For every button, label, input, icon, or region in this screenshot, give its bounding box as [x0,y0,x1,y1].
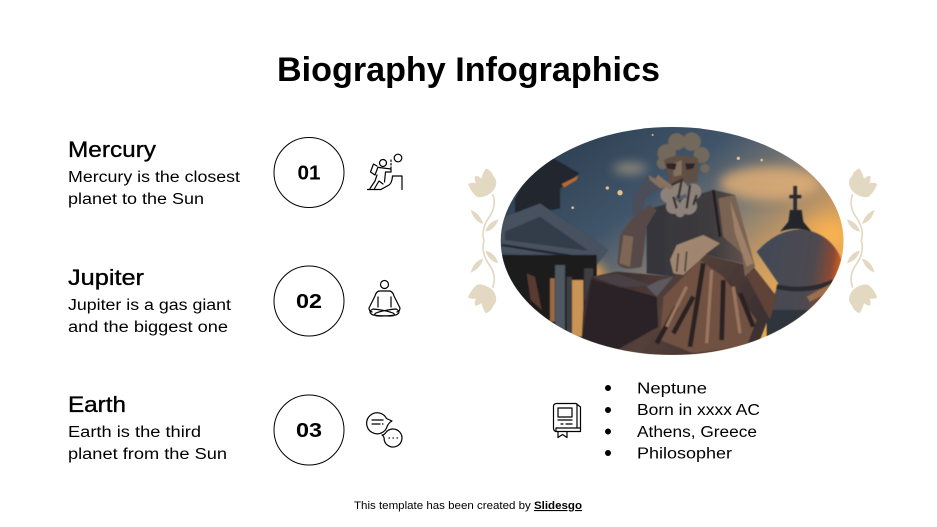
sparks [571,134,763,209]
panel: Jupiter [68,265,400,336]
head [657,132,710,173]
robe [582,253,777,360]
text: Mercury description: planet to the Sun [68,191,204,208]
number badge 01 [274,138,344,208]
icon: book [554,404,580,438]
text: Jupiter description [68,297,232,336]
heading: Mercury: Mercury [68,137,156,162]
heading: Jupiter: Jupiter [68,265,144,290]
bullet list: biography facts: Neptune [637,380,707,398]
bullet list: biography facts: Athens, Greece [637,424,757,441]
bullet list: biography facts [605,380,760,462]
text: Jupiter description: and the biggest one [68,319,228,336]
decoration: right floral sprig [847,168,877,313]
text: Earth description: Earth is the third [68,424,201,441]
panel: Earth [68,392,402,465]
number badge 01: 01 [298,162,320,184]
hand on knee [670,235,720,275]
text: Jupiter description: Jupiter is a gas giant [68,297,232,314]
oval portrait: statue of philosopher [500,127,844,355]
icon: speech bubbles [367,413,402,447]
number badge 03 [274,395,344,465]
title: Biography Infographics [277,51,660,89]
number badge 03: 03 [296,420,322,442]
arm [617,205,657,269]
decoration: left floral sprig [468,168,498,313]
icon: meditating person [369,280,400,316]
text: Earth description: planet from the Sun [68,446,227,463]
text: Mercury description [68,169,241,208]
text: Earth description [68,424,227,463]
bullet list: biography facts: Philosopher [637,446,732,462]
text: Mercury description: Mercury is the closest [68,169,241,186]
torso [647,190,755,277]
footer credit: This template has been created by Slidesgo [354,500,582,512]
bullet list: biography facts: Born in xxxx AC [637,402,760,419]
heading: Earth: Earth [68,392,126,417]
dome [757,229,843,360]
panel: Mercury [68,137,402,208]
icon: climber [368,154,402,190]
left temple [515,157,579,217]
number badge 02: 02 [296,291,322,313]
number badge 02 [274,266,344,336]
